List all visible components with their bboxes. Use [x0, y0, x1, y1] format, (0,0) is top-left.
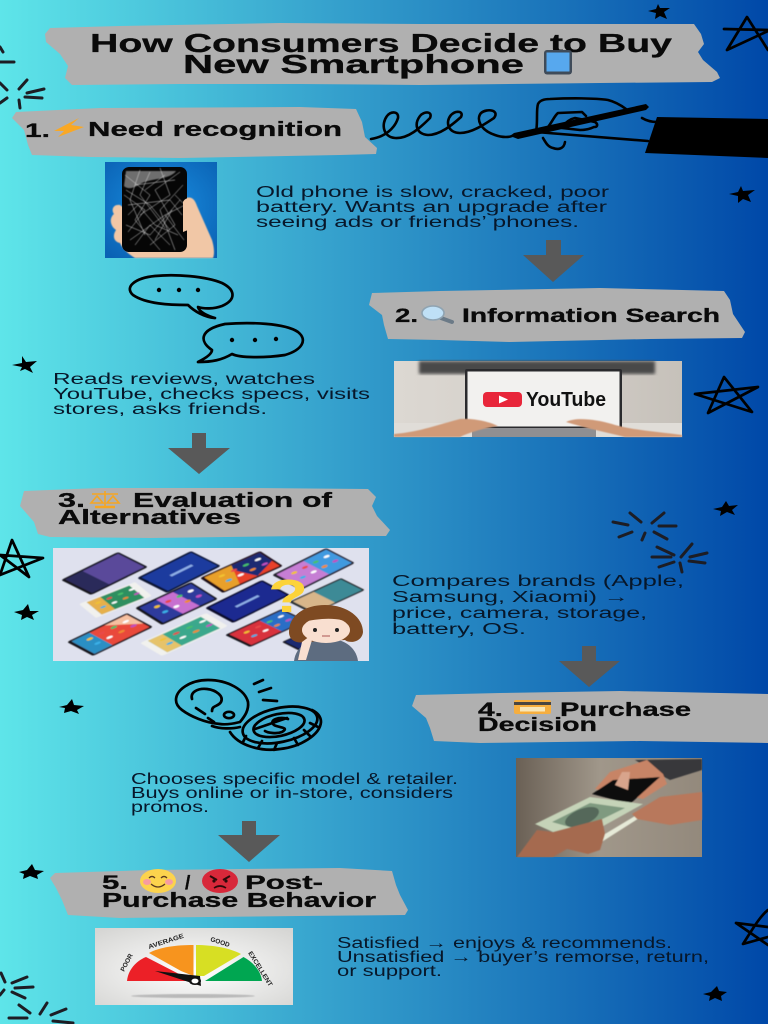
icon: question mark bulb and coin: [176, 680, 321, 750]
panel: step 1 heading: 1.: [25, 121, 50, 142]
icon: angry emoji: [202, 869, 238, 893]
icon: question mark: ?: [268, 570, 308, 622]
text: step 3 description: price, camera, storage,: [392, 605, 647, 622]
text: step 3 description: Compares brands (Apple,: [392, 573, 684, 590]
text: step 4 description: [131, 771, 458, 816]
text: step 5 description: [337, 935, 709, 980]
star doodle top: [648, 4, 670, 19]
panel: step 5 heading: /: [185, 873, 191, 894]
outline star top right: [724, 17, 768, 50]
text: step 5 description: or support.: [337, 963, 442, 980]
panel: step 3 heading: 3.: [58, 490, 85, 512]
arrow 4: [218, 821, 280, 862]
text: step 1 description: [256, 184, 609, 231]
arrow 2: [168, 433, 230, 474]
arrow 1: [523, 240, 584, 282]
burst right 1: [613, 513, 676, 540]
image: satisfaction gauge: AVERAGE: [147, 933, 186, 951]
text: step 4 description: Chooses specific model & retailer.: [131, 771, 458, 788]
text: step 2 description: Reads reviews, watches: [53, 371, 315, 388]
text: step 4 description: promos.: [131, 799, 209, 816]
panel: step 5 heading: Post-: [245, 873, 323, 894]
panel: step 2 heading: Information Search: [462, 306, 720, 327]
panel: step 5 heading: 5.: [102, 873, 128, 894]
arrow 3: [559, 646, 620, 687]
panel: step 1 heading: Need recognition: [88, 119, 342, 141]
icon: credit card: [514, 700, 551, 714]
panel: step 1 heading: [12, 107, 377, 158]
panel: step 5 heading: Purchase Behavior: [102, 890, 376, 912]
text: step 2 description: YouTube, checks specs, visits: [53, 386, 370, 403]
panel: step 5 heading: [50, 868, 408, 918]
title banner: [45, 23, 720, 85]
image: satisfaction gauge: POOR: [120, 952, 135, 973]
burst doodle top left: [0, 47, 44, 108]
star doodle right: [729, 186, 755, 203]
text: step 2 description: stores, asks friends.: [53, 401, 267, 418]
icon: smiling emoji: [140, 869, 176, 893]
icon: smartphone emoji: [544, 50, 572, 74]
text: step 3 description: battery, OS.: [392, 621, 526, 638]
icon: magnifier: [422, 306, 452, 322]
title banner: How Consumers Decide to Buy: [90, 28, 673, 58]
image: satisfaction gauge: EXCELLENT: [246, 950, 273, 988]
icon: speech bubble 1: [130, 275, 232, 318]
icon: YouTube logo: YouTube: [526, 389, 606, 411]
star left: [14, 604, 39, 620]
star left: [12, 356, 37, 373]
outline star right: [695, 377, 758, 413]
burst bottom left 1: [0, 973, 33, 998]
icon: YouTube logo: [483, 389, 606, 411]
panel: step 3 heading: [20, 488, 390, 538]
icon: speech bubble 2: [198, 323, 303, 362]
text: step 5 description: Satisfied → enjoys & recommends.: [337, 935, 672, 952]
image: assorted smartphones with thinking child: [53, 548, 369, 661]
icon: lightning: [54, 118, 84, 137]
icon: balance scales: [91, 491, 119, 507]
image: cracked phone in hand: [105, 162, 217, 258]
text: step 4 description: Buys online or in-store, considers: [131, 785, 453, 802]
panel: step 4 heading: [412, 691, 768, 743]
burst right 2: [652, 544, 707, 572]
outline star left: [0, 540, 43, 577]
text: step 1 description: seeing ads or friends’ phones.: [256, 214, 579, 231]
burst bottom left 2: [9, 1003, 73, 1023]
panel: step 4 heading: Purchase: [560, 700, 691, 721]
panel: step 4 heading: 4.: [478, 700, 503, 721]
text: step 3 description: Samsung, Xiaomi) →: [392, 589, 629, 606]
text: step 1 description: Old phone is slow, cracked, poor: [256, 184, 609, 201]
image: satisfaction gauge: [95, 928, 293, 1005]
text: step 3 description: [392, 573, 684, 638]
doodle: hand drawing squiggle: [371, 98, 768, 158]
image: laptop showing YouTube: [394, 361, 682, 437]
panel: step 3 heading: Evaluation of: [133, 490, 333, 512]
text: step 1 description: battery. Wants an upgrade after: [256, 199, 607, 216]
title banner: New Smartphone: [183, 49, 524, 79]
image: satisfaction gauge: GOOD: [209, 936, 231, 949]
star left: [19, 864, 44, 879]
image: cash and card exchange: [516, 758, 702, 857]
gauge needle: [155, 971, 201, 986]
star bottom right: [703, 986, 727, 1001]
panel: step 2 heading: 2.: [395, 306, 418, 327]
star left: [59, 699, 84, 714]
text: step 5 description: Unsatisfied → buyer’s remorse, return,: [337, 949, 709, 966]
panel: step 3 heading: Alternatives: [58, 507, 241, 529]
panel: step 4 heading: Decision: [478, 715, 597, 736]
outline star bottom right: [736, 910, 768, 945]
text: step 2 description: [53, 371, 370, 418]
sleeve: [645, 117, 768, 158]
star right: [713, 501, 738, 516]
panel: step 2 heading: [369, 288, 745, 342]
thinking child illustration: [289, 605, 363, 661]
